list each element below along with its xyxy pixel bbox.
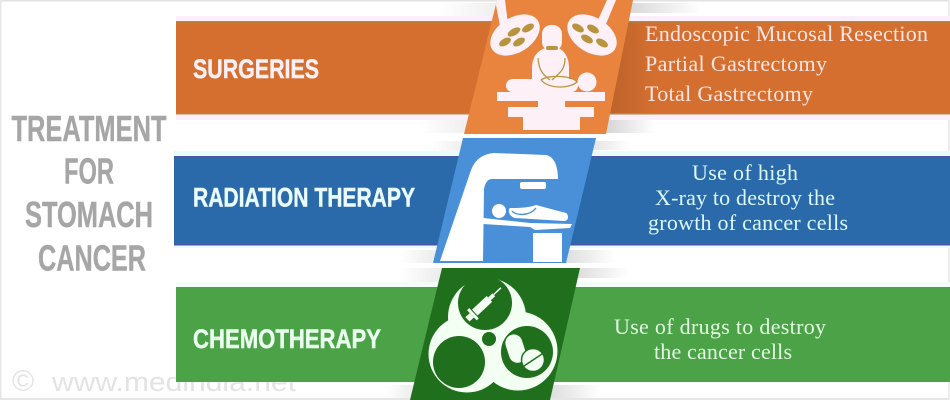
circle right with pills xyxy=(501,326,553,378)
machine arm xyxy=(440,153,558,261)
icon panel: radiation machine xyxy=(433,138,596,263)
patient body xyxy=(509,205,568,221)
table top xyxy=(483,218,572,230)
title: CANCER xyxy=(38,238,146,278)
title: STOMACH xyxy=(25,194,153,235)
heading: chemotherapy: CHEMOTHERAPY xyxy=(193,324,381,354)
text block: radiation therapy: Use of high xyxy=(692,160,798,185)
text block: surgeries: Total Gastrectomy xyxy=(645,81,813,106)
surgeon body xyxy=(532,48,569,80)
left lamp xyxy=(490,14,540,56)
panel: surgeries bar xyxy=(176,21,950,114)
watermark: © xyxy=(12,365,34,398)
panel: chemotherapy bar xyxy=(176,287,950,382)
right lamp xyxy=(567,14,617,56)
machine head xyxy=(520,182,546,189)
icon panel: biohazard xyxy=(410,268,580,400)
heading: surgeries: SURGERIES xyxy=(193,54,319,84)
text block: surgeries xyxy=(645,21,928,106)
circle top with syringe xyxy=(458,276,512,330)
patient head xyxy=(492,204,506,218)
pills xyxy=(503,332,528,365)
lamp arms xyxy=(496,0,508,25)
icon panel: surgery xyxy=(464,0,633,134)
circle left xyxy=(433,336,485,388)
text block: radiation therapy: growth of cancer cells xyxy=(648,210,848,235)
patient body xyxy=(506,79,578,92)
syringe xyxy=(463,283,506,324)
text block: chemotherapy: the cancer cells xyxy=(654,339,792,364)
surgeon head xyxy=(542,25,562,51)
title: TREATMENT xyxy=(12,108,167,149)
text block: chemotherapy: Use of drugs to destroy xyxy=(614,314,826,339)
watermark: www.medindia.net xyxy=(51,367,297,397)
table base xyxy=(533,233,562,262)
text block: radiation therapy: X-ray to destroy the xyxy=(655,185,835,210)
panel: radiation therapy bar xyxy=(174,156,950,246)
text block: surgeries: Partial Gastrectomy xyxy=(645,51,827,76)
title xyxy=(12,108,167,278)
heading: radiation therapy: RADIATION THERAPY xyxy=(193,182,415,212)
biohazard symbol xyxy=(428,272,558,392)
text block: surgeries: Endoscopic Mucosal Resection xyxy=(645,21,928,46)
text block: chemotherapy xyxy=(614,314,826,364)
patient head xyxy=(578,72,596,92)
title: FOR xyxy=(64,150,114,192)
table xyxy=(497,92,605,101)
text block: radiation therapy xyxy=(648,160,848,235)
